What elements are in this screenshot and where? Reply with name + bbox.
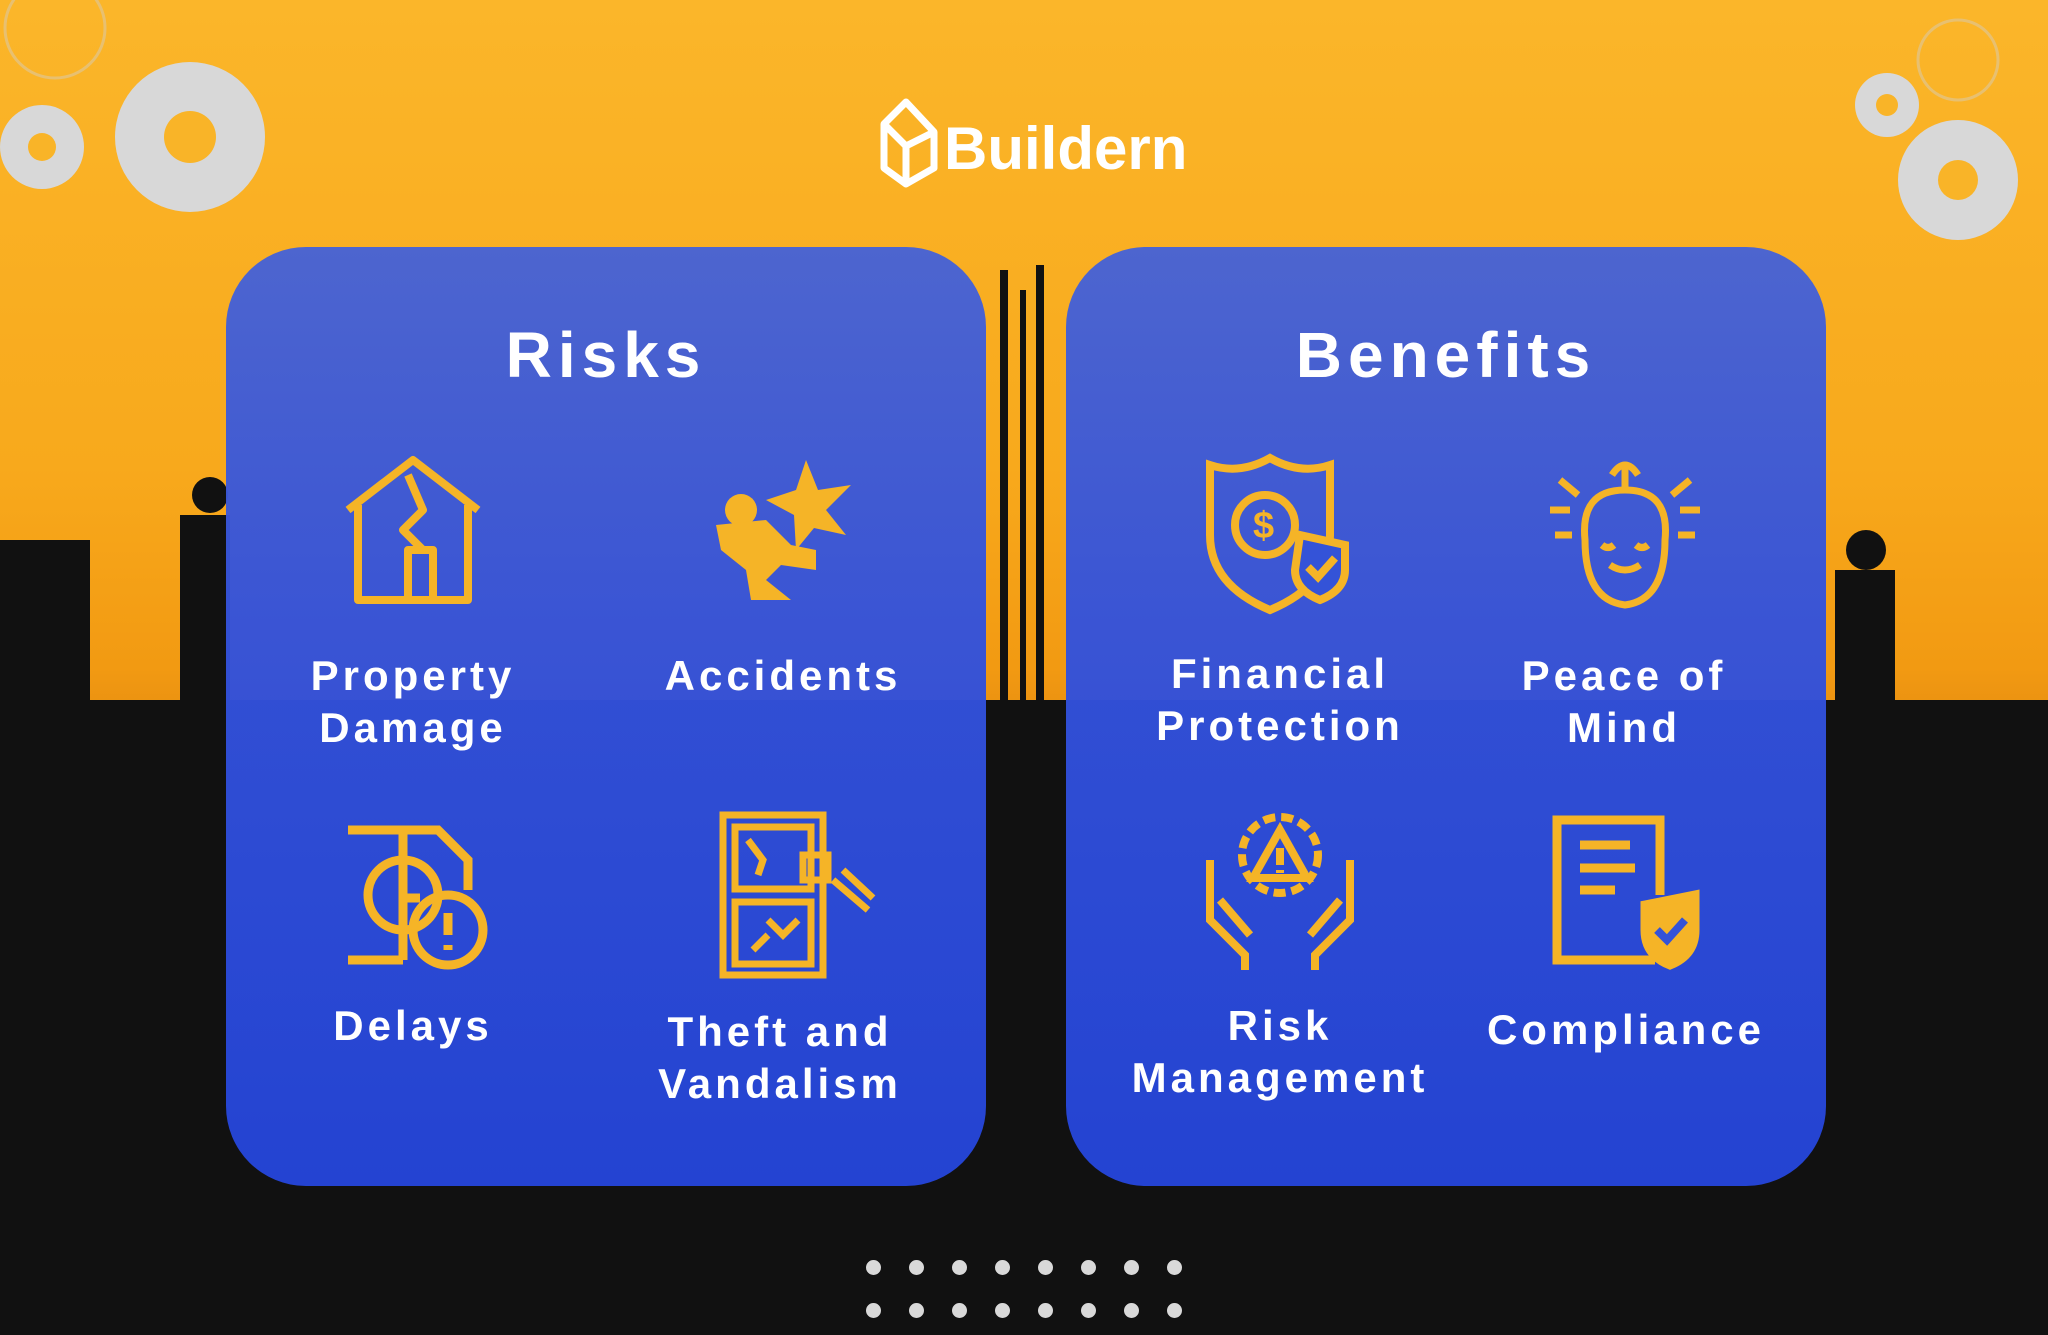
label: compliance: Compliance	[1487, 1006, 1765, 1053]
label: risk management	[1132, 1002, 1428, 1101]
label: property damage: Property	[311, 652, 515, 699]
panel: benefits	[1066, 247, 1826, 1186]
label: accidents: Accidents	[665, 652, 901, 699]
label: financial protection: Protection	[1156, 702, 1404, 749]
icon: accidents	[716, 460, 851, 600]
label: property damage	[311, 652, 515, 751]
label: risk management: Risk	[1228, 1002, 1332, 1049]
label: risk management: Management	[1132, 1054, 1428, 1101]
icon: theft and vandalism	[720, 812, 876, 978]
label: property damage: Damage	[319, 704, 507, 751]
label: peace of mind	[1522, 652, 1726, 751]
label: theft and vandalism: Vandalism	[658, 1060, 902, 1107]
label: peace of mind: Peace of	[1522, 652, 1726, 699]
gears	[0, 62, 2018, 240]
label: financial protection	[1156, 650, 1404, 749]
logo: Buildern	[944, 115, 1187, 182]
icon: financial protection: $	[1253, 505, 1274, 547]
logo	[880, 98, 1187, 188]
icon: delays	[348, 826, 488, 970]
icon: financial protection	[1206, 453, 1349, 614]
dots decoration	[866, 1260, 1182, 1318]
icon: peace of mind	[1550, 462, 1700, 608]
label: delays: Delays	[333, 1002, 493, 1049]
icon: risk management	[1206, 813, 1354, 970]
heading: risks: Risks	[506, 319, 706, 391]
panel: risks	[226, 247, 986, 1186]
label: peace of mind: Mind	[1567, 704, 1681, 751]
label: financial protection: Financial	[1171, 650, 1389, 697]
icon: property damage	[346, 456, 480, 604]
heading: benefits: Benefits	[1296, 319, 1596, 391]
label: theft and vandalism	[658, 1008, 902, 1107]
label: theft and vandalism: Theft and	[668, 1008, 892, 1055]
icon: compliance	[1552, 816, 1700, 970]
